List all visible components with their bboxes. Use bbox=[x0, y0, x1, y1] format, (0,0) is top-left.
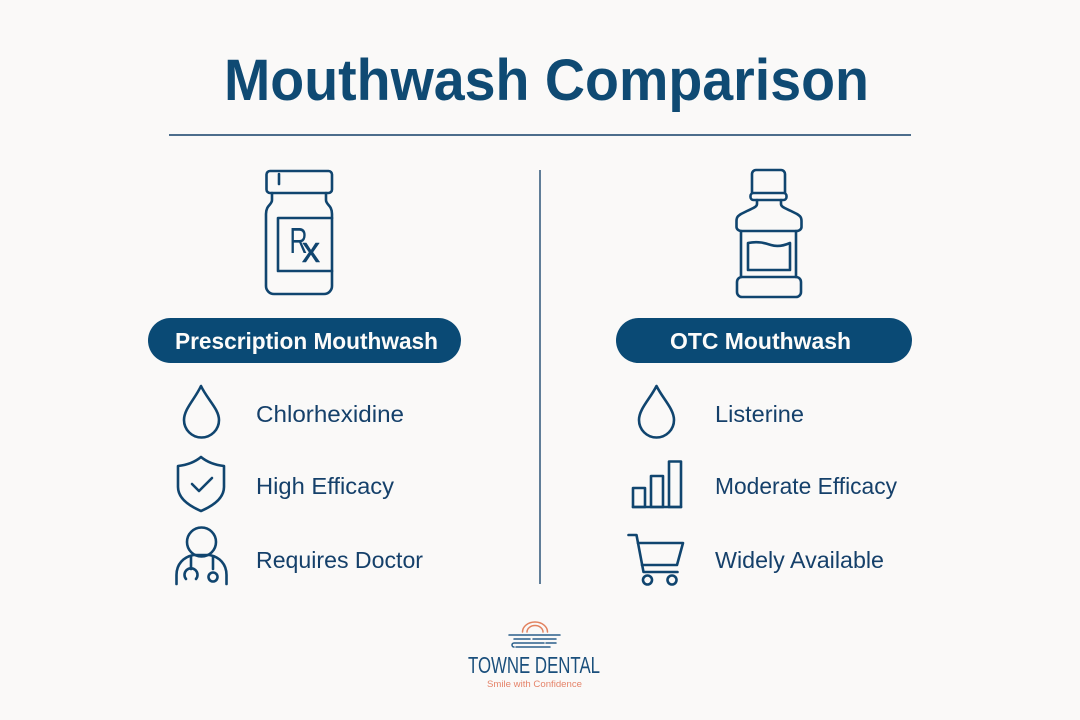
heading: otc mouthwash: OTC Mouthwash bbox=[670, 328, 851, 354]
heading: prescription mouthwash bbox=[148, 318, 461, 363]
text: listerine: Listerine bbox=[715, 401, 804, 427]
logo wordmark: TOWNE DENTAL bbox=[468, 652, 600, 678]
tagline: Smile with Confidence bbox=[487, 679, 582, 690]
icon: mouthwash bottle bbox=[736, 170, 802, 297]
text: moderate efficacy: Moderate Efficacy bbox=[715, 473, 897, 499]
icon: prescription bottle: x bbox=[302, 229, 320, 270]
icon: sun over waves bbox=[509, 622, 560, 647]
heading: prescription mouthwash: Prescription Mouthwash bbox=[175, 328, 438, 354]
text: high efficacy: High Efficacy bbox=[256, 473, 395, 499]
icon: prescription bottle bbox=[266, 171, 332, 294]
panel: otc mouthwash bbox=[616, 170, 912, 584]
logo: towne dental bbox=[468, 622, 600, 690]
text: requires doctor: Requires Doctor bbox=[256, 547, 423, 573]
icon: prescription bottle: R bbox=[290, 220, 308, 261]
heading: otc mouthwash bbox=[616, 318, 912, 363]
icon: shield check bbox=[178, 457, 224, 511]
text: widely available: Widely Available bbox=[715, 547, 884, 573]
icon: doctor bbox=[176, 528, 226, 584]
title: Mouthwash Comparison bbox=[224, 48, 869, 113]
panel: prescription mouthwash bbox=[148, 171, 461, 584]
icon: bar chart bbox=[633, 462, 681, 507]
icon: shopping cart bbox=[628, 535, 683, 584]
icon: drop bbox=[184, 386, 219, 438]
text: chlorhexidine: Chlorhexidine bbox=[256, 401, 404, 427]
icon: drop bbox=[639, 386, 674, 438]
